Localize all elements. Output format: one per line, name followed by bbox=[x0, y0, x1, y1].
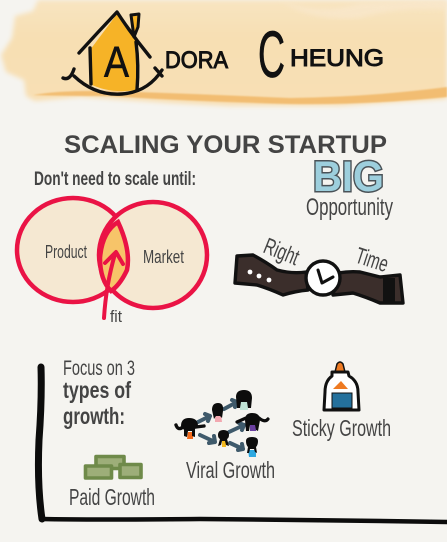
arrow to overlap bbox=[104, 252, 123, 318]
name: Adora Cheung: DORA bbox=[165, 47, 228, 74]
person 4 bbox=[237, 413, 268, 431]
focus on 3 types of growth: types of bbox=[63, 377, 131, 403]
overlap bbox=[100, 222, 128, 291]
person 1 bbox=[176, 418, 204, 439]
product circle bbox=[17, 198, 129, 302]
focus on 3 types of growth bbox=[63, 357, 135, 429]
logo letter A: A bbox=[104, 38, 130, 87]
chart axes bbox=[38, 367, 447, 522]
name: Adora Cheung: HEUNG bbox=[290, 45, 384, 72]
venn diagram: product market fit bbox=[17, 198, 207, 326]
sticky growth label: Sticky Growth bbox=[292, 415, 391, 441]
person 5 bbox=[218, 430, 229, 447]
title: SCALING YOUR STARTUP bbox=[64, 131, 387, 159]
icon: viral network of people bbox=[176, 390, 268, 457]
icon: money stack bbox=[86, 456, 141, 478]
network arrows bbox=[198, 400, 244, 450]
big opportunity bbox=[306, 153, 393, 221]
time label: Time bbox=[352, 242, 392, 277]
subheading: don't need to scale until: Don't need to scale until: bbox=[34, 169, 196, 190]
person 2 bbox=[212, 403, 223, 422]
viral growth label: Viral Growth bbox=[186, 457, 275, 483]
person 3 bbox=[236, 390, 252, 410]
right time watch bbox=[235, 233, 403, 303]
header banner bbox=[1, 0, 447, 106]
clock face bbox=[306, 261, 340, 295]
icon: glue bottle bbox=[324, 362, 359, 410]
market circle bbox=[99, 202, 207, 308]
market label: Market bbox=[143, 247, 184, 267]
fit label: fit bbox=[110, 307, 122, 326]
paid growth label: Paid Growth bbox=[69, 484, 155, 510]
product label: Product bbox=[45, 242, 87, 262]
right label: Right bbox=[260, 233, 304, 270]
name: Adora Cheung: C bbox=[258, 17, 285, 91]
name: Adora Cheung bbox=[165, 17, 384, 91]
big opportunity: BIG bbox=[313, 153, 384, 201]
logo: house with letter A bbox=[63, 12, 162, 94]
opportunity label: Opportunity bbox=[306, 194, 393, 221]
focus on 3 types of growth: Focus on 3 bbox=[63, 357, 135, 380]
focus on 3 types of growth: growth: bbox=[63, 403, 125, 429]
person 6 bbox=[246, 437, 258, 457]
